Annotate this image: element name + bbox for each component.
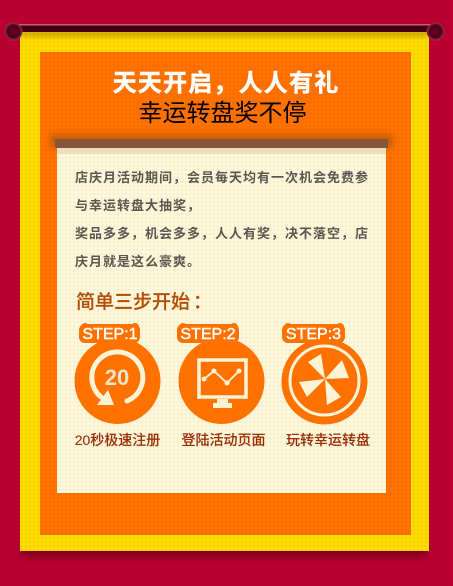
icon: orange circle with monitor chart: [178, 338, 264, 424]
title: [113, 70, 339, 127]
step 2: [177, 323, 266, 448]
badge: STEP:1: STEP:1: [82, 326, 138, 343]
intro text: [75, 170, 369, 269]
title: 幸运转盘奖不停: [138, 100, 306, 127]
step 1: [74, 323, 160, 448]
icon: orange circle with prize wheel: [282, 338, 368, 424]
intro text: 奖品多多，机会多多，人人有奖，决不落空，店: [75, 226, 369, 241]
badge: STEP:2: STEP:2: [180, 326, 236, 343]
badge: STEP:3: STEP:3: [286, 326, 341, 343]
intro text: 与幸运转盘大抽奖，: [75, 198, 201, 213]
intro text: 店庆月活动期间，会员每天均有一次机会免费参: [75, 170, 369, 185]
title: 天天开启，人人有礼: [113, 70, 339, 97]
intro text: 庆月就是这么豪爽。: [75, 254, 201, 269]
label: step 2: 登陆活动页面: [182, 432, 266, 448]
step 3: [282, 323, 370, 448]
scroll rod with knobs: [4, 22, 444, 40]
heading: three steps: 简单三步开始：: [76, 291, 212, 313]
label: step 3: 玩转幸运转盘: [286, 432, 370, 448]
orange panel: [40, 52, 411, 535]
icon: orange circle with 20-second timer: 20: [105, 365, 129, 390]
cream content panel: [50, 134, 393, 493]
label: step 1: 20秒极速注册: [75, 432, 160, 448]
